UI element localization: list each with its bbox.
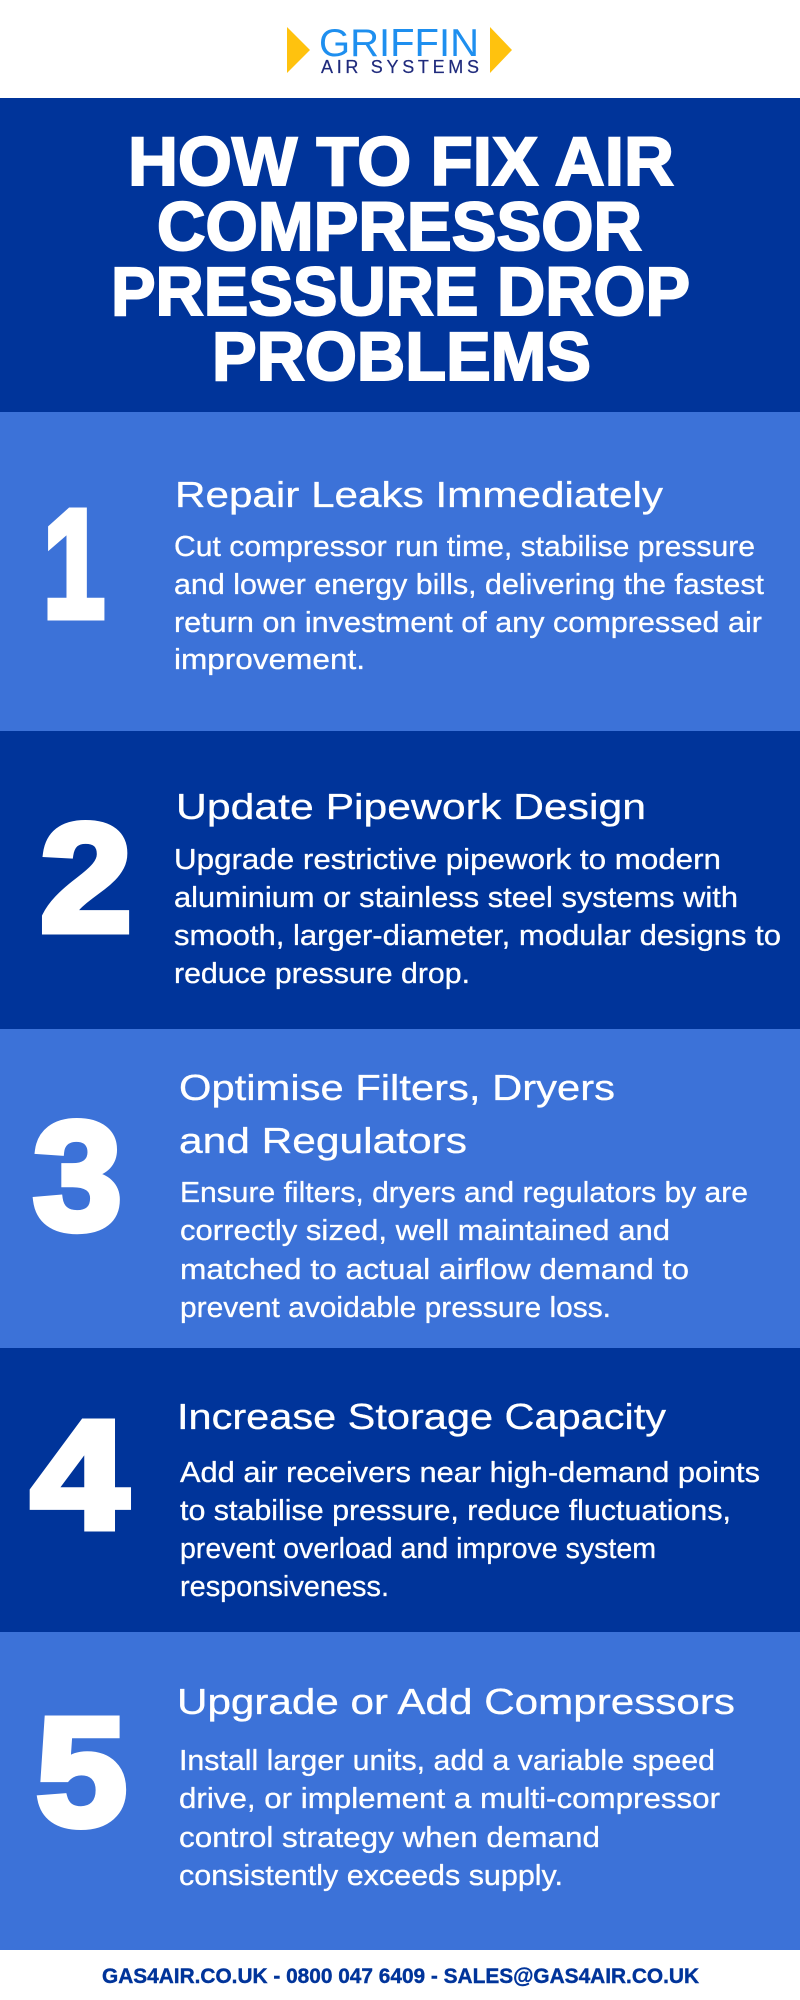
heading: update pipework design: Update Pipework Design xyxy=(176,786,646,827)
panel: step 5 upgrade compressors xyxy=(0,1632,800,1950)
title banner: HOW TO FIX AIR xyxy=(128,123,674,200)
body text: step 3: correctly sized, well maintained and xyxy=(180,1215,670,1247)
body text: step 4: responsiveness. xyxy=(180,1571,389,1603)
body text: step 3: matched to actual airflow demand to xyxy=(180,1254,689,1286)
heading: optimise filters, dryers and regulators: and Regulators xyxy=(179,1120,467,1161)
body text: step 4: Add air receivers near high-demand points xyxy=(180,1457,760,1489)
number 1: 1 xyxy=(43,478,105,650)
body text: step 5: control strategy when demand xyxy=(179,1822,600,1854)
logo: Griffin Air Systems: GRIFFIN xyxy=(319,22,479,65)
body text: step 5 xyxy=(179,1745,720,1892)
title banner xyxy=(0,98,800,412)
body text: step 3: Ensure filters, dryers and regulators by are xyxy=(180,1177,748,1209)
heading: optimise filters, dryers and regulators xyxy=(179,1067,615,1161)
footer contact line: GAS4AIR.CO.UK - 0800 047 6409 - SALES@GAS4AIR.CO.UK xyxy=(102,1965,699,1988)
body text: step 1: improvement. xyxy=(174,644,365,676)
heading: optimise filters, dryers and regulators: Optimise Filters, Dryers xyxy=(179,1067,615,1108)
logo: Griffin Air Systems: AIR SYSTEMS xyxy=(321,57,479,77)
title banner: PROBLEMS xyxy=(212,318,591,395)
heading: repair leaks immediately: Repair Leaks Immediately xyxy=(175,474,663,515)
body text: step 4: prevent overload and improve system xyxy=(180,1533,656,1565)
body text: step 3: prevent avoidable pressure loss. xyxy=(180,1292,611,1324)
body text: step 1: Cut compressor run time, stabilise pressure xyxy=(174,531,755,563)
body text: step 2: reduce pressure drop. xyxy=(174,958,470,990)
title banner: COMPRESSOR xyxy=(157,188,642,265)
number 5: 5 xyxy=(36,1686,127,1858)
panel: step 3 optimise filters xyxy=(0,1029,800,1348)
number 2: 2 xyxy=(40,792,132,964)
body text: step 5: consistently exceeds supply. xyxy=(179,1860,563,1892)
number 4: 4 xyxy=(31,1389,128,1561)
panel: step 2 update pipework xyxy=(0,731,800,1029)
panel: step 1 repair leaks xyxy=(0,412,800,731)
body text: step 5: drive, or implement a multi-compressor xyxy=(179,1783,720,1815)
body text: step 2: smooth, larger-diameter, modular designs to xyxy=(174,920,781,952)
body text: step 2: aluminium or stainless steel systems with xyxy=(174,882,738,914)
panel: step 4 increase storage xyxy=(0,1348,800,1632)
logo: Griffin Air Systems xyxy=(287,22,512,77)
number 3: 3 xyxy=(33,1090,122,1262)
title banner: PRESSURE DROP xyxy=(111,253,690,330)
body text: step 1: and lower energy bills, delivering the fastest xyxy=(174,569,764,601)
body text: step 3 xyxy=(180,1177,748,1324)
body text: step 4: to stabilise pressure, reduce fluctuations, xyxy=(180,1495,731,1527)
body text: step 2 xyxy=(174,844,781,990)
heading: increase storage capacity: Increase Storage Capacity xyxy=(177,1396,666,1437)
heading: upgrade or add compressors: Upgrade or Add Compressors xyxy=(177,1681,735,1722)
body text: step 2: Upgrade restrictive pipework to modern xyxy=(174,844,721,876)
body text: step 5: Install larger units, add a variable speed xyxy=(179,1745,715,1777)
body text: step 1 xyxy=(174,531,764,676)
body text: step 1: return on investment of any compressed air xyxy=(174,607,762,639)
body text: step 4 xyxy=(180,1457,760,1603)
